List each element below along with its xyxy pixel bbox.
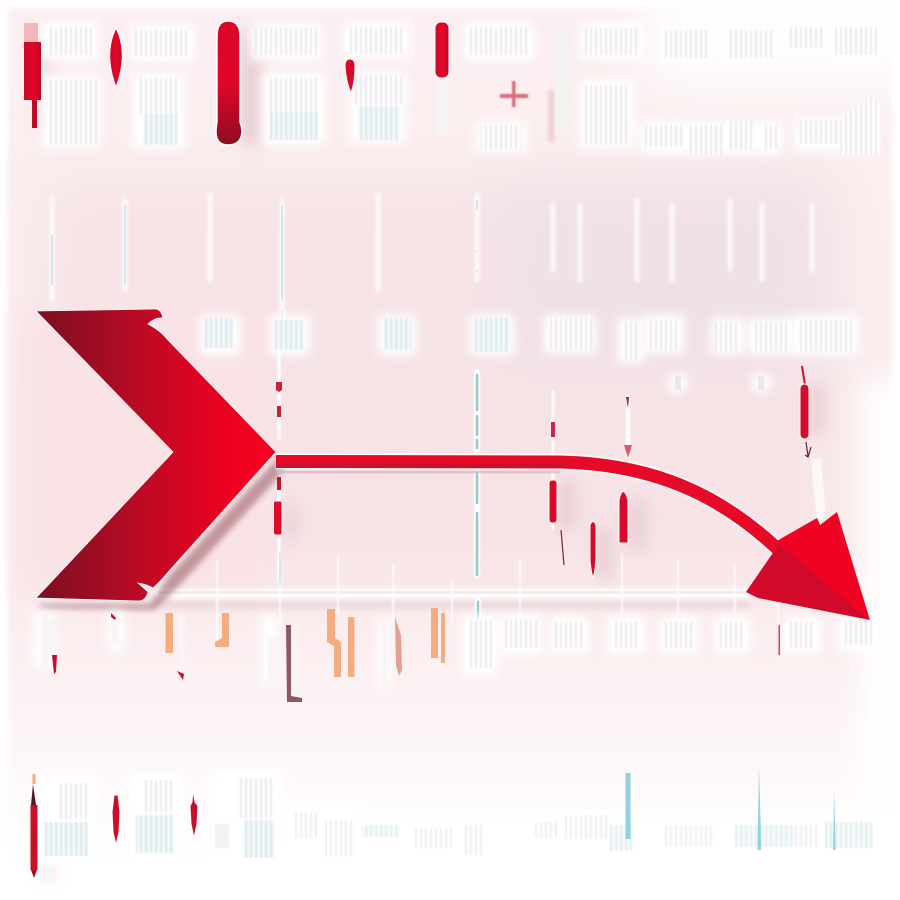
axis line shadow and line: [155, 589, 750, 609]
icon: thermometer: [216, 21, 242, 145]
column at 279: [274, 350, 282, 583]
bottom teal spires: [626, 767, 836, 850]
bottom row blocks: [40, 770, 873, 862]
icon: long pen: [30, 774, 38, 878]
curved arrow shaft: [276, 462, 785, 556]
red capsule at 593: [590, 522, 596, 578]
small red markers along the line: [274, 350, 826, 583]
small red tips: [52, 613, 184, 680]
icon: drop marker: [110, 28, 122, 87]
middle row teal ticks: [52, 200, 477, 345]
capsule at 804: [800, 366, 811, 457]
top row text blocks: [42, 22, 884, 62]
lower row bars: [34, 608, 878, 702]
teal vertical dashed line: [477, 372, 478, 622]
salmon bar: [395, 617, 402, 676]
icon: capsule with pale stem: [435, 22, 449, 136]
white bar above arrowhead: [811, 458, 826, 525]
brown bar: [286, 625, 302, 702]
right labels: [462, 615, 878, 675]
column at 552: [549, 390, 564, 565]
vertical ticks on axis: [217, 555, 778, 640]
pale and white bars: [41, 614, 387, 697]
bottom red pens: [30, 774, 198, 878]
icon: pale cross: [500, 81, 528, 107]
chevron body: [36, 309, 276, 601]
icon: pale tall bar: [548, 24, 571, 142]
second row text blocks: [42, 72, 880, 155]
middle row glowing ticks: [52, 195, 812, 350]
column at 625: [619, 395, 632, 543]
chevron arrow tail: [36, 309, 285, 610]
icon: split marker: [24, 23, 41, 128]
middle labels: [200, 315, 858, 393]
icon: short pen: [112, 795, 120, 845]
icon: small pill: [345, 59, 355, 93]
red marker icons, top row: [24, 21, 571, 145]
thin red tick: [778, 625, 780, 655]
orange bars: [166, 608, 445, 677]
chevron shadow: [40, 340, 285, 610]
arrowhead: [746, 512, 870, 620]
icon: dart pen: [190, 790, 198, 838]
